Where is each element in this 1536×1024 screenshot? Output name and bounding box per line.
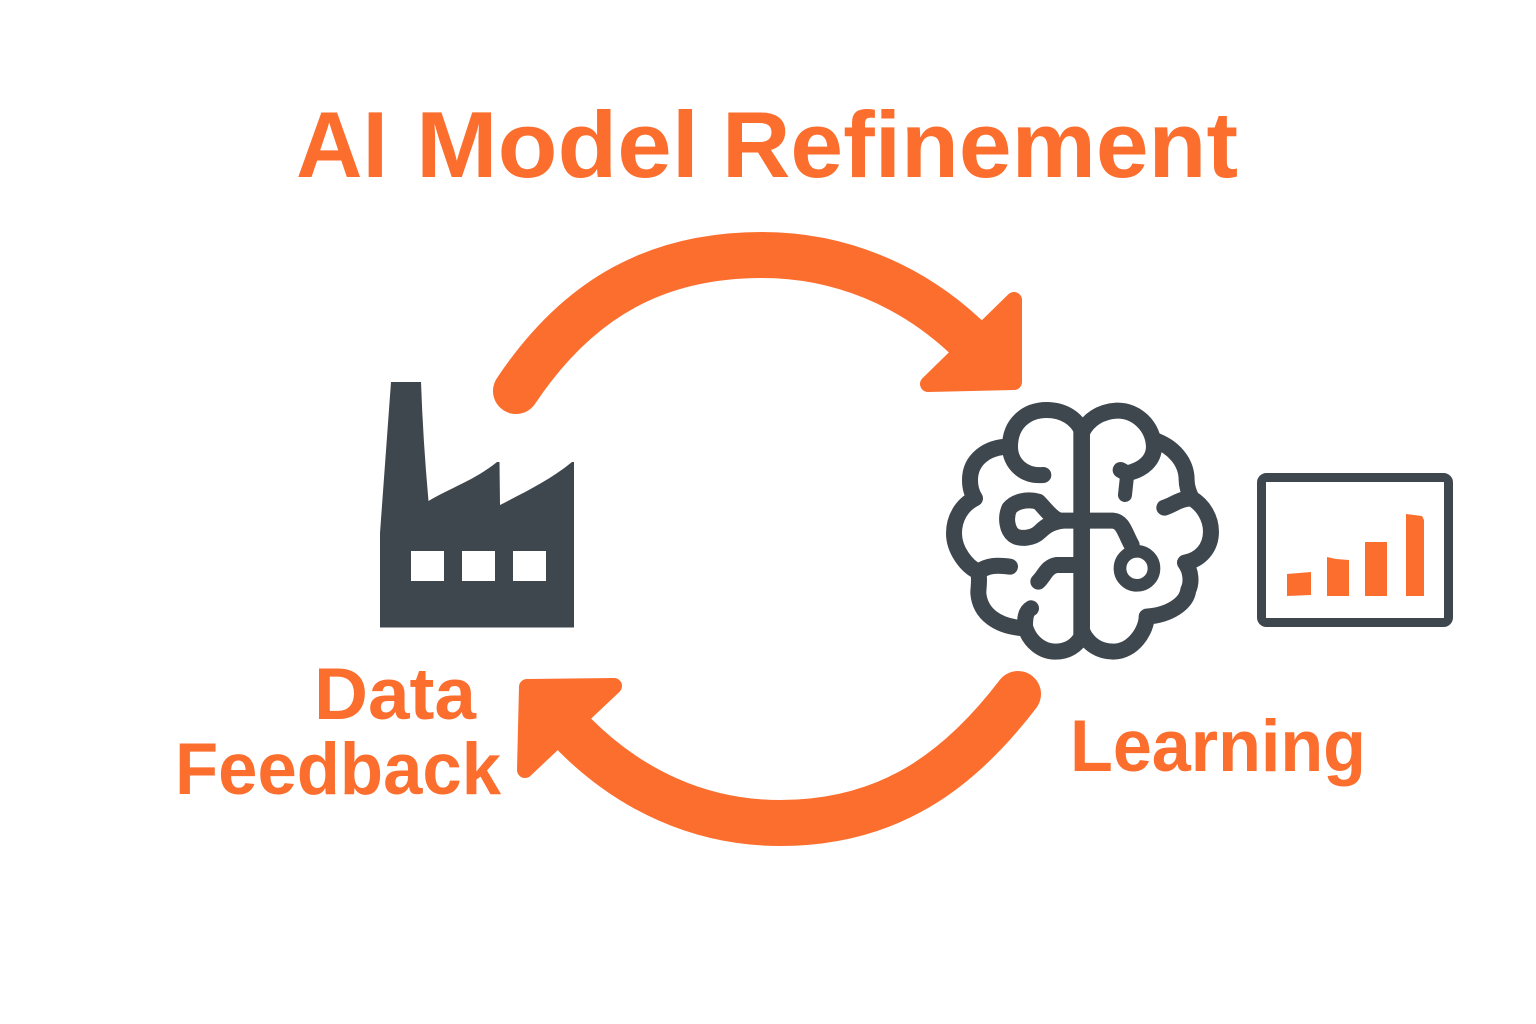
chart bars [1287,514,1424,596]
arrow: top, data feedback to learning [516,255,1014,391]
icon: factory [380,382,574,628]
label: data feedback: Data [314,654,477,735]
chart frame [1262,478,1448,622]
title: Refinement [722,92,1238,197]
title: Model [416,92,699,197]
label: data feedback: Feedback [175,729,501,810]
icon: bar chart panel [1262,478,1448,622]
label: data feedback [175,654,501,810]
label: learning: Learning [1070,706,1366,787]
icon: brain [954,410,1211,652]
arrow: bottom, learning to data feedback [525,686,1018,823]
title: AI [296,92,388,197]
